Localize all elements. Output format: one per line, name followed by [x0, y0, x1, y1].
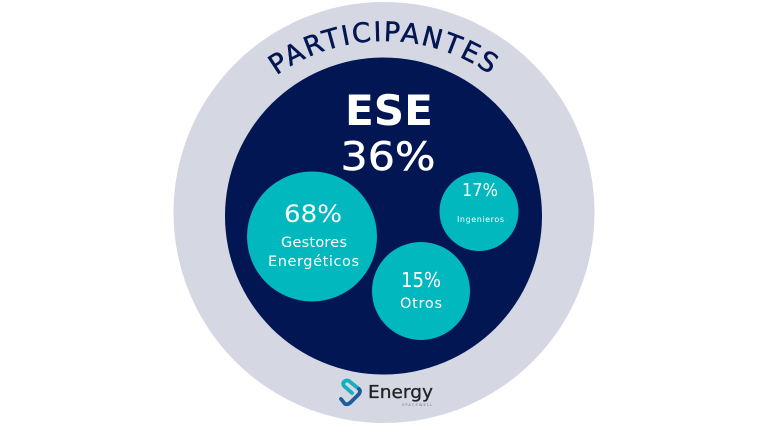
bubble: ingenieros: Ingenieros — [457, 215, 504, 224]
logo: energy spacewell — [341, 380, 433, 407]
wordmark: Spacewell: SPACEWELL — [402, 403, 432, 407]
bubble: otros — [372, 242, 470, 340]
navy circle — [225, 58, 542, 374]
bubble: ingenieros: 17% — [462, 180, 498, 201]
icon: logo mark — [341, 380, 360, 404]
bubble: ingenieros — [440, 172, 518, 251]
title: participantes: PARTICIPANTES — [267, 21, 498, 74]
bubble: gestores energeticos — [247, 172, 377, 302]
heading: 36%: 36% — [340, 135, 436, 180]
wordmark: Energy: Energy — [368, 382, 433, 403]
bubble: gestores energeticos: Energéticos — [268, 254, 359, 270]
outer grey circle — [174, 2, 594, 423]
bubble: otros: 15% — [401, 268, 441, 292]
bubble: otros: Otros — [400, 296, 442, 312]
bubble: gestores energeticos: 68% — [284, 200, 342, 228]
bubble: gestores energeticos: Gestores — [281, 235, 347, 251]
heading: ESE: ESE — [345, 86, 433, 135]
